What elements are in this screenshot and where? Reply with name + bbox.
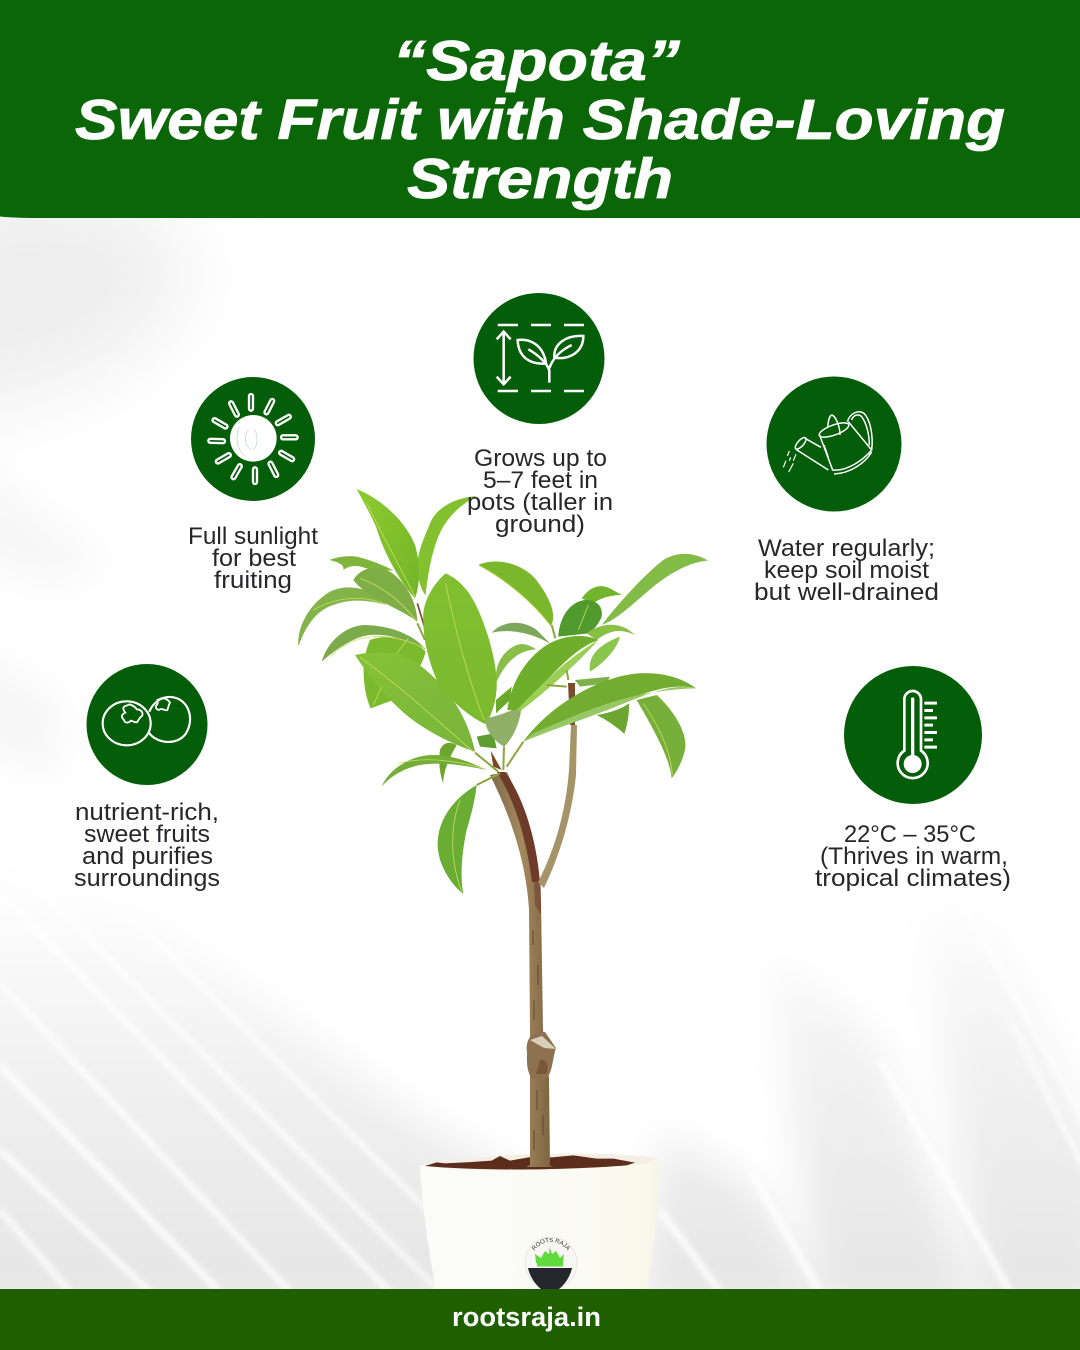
icon: sun bbox=[191, 377, 315, 501]
label: water: Water regularly; bbox=[758, 535, 935, 562]
label: temperature: tropical climates) bbox=[815, 865, 1011, 892]
pot logo: ROOTS RAJA bbox=[532, 1238, 570, 1250]
label: sunlight: fruiting bbox=[214, 567, 292, 594]
label: height bbox=[467, 445, 613, 538]
header banner bbox=[0, 0, 1080, 218]
label: water bbox=[754, 535, 939, 606]
icon: plant height bbox=[474, 293, 604, 424]
icon: fruits bbox=[86, 664, 208, 785]
pot bbox=[420, 1154, 658, 1289]
label: sunlight: for best bbox=[212, 545, 296, 572]
label: fruits bbox=[74, 799, 220, 892]
label: fruits: surroundings bbox=[74, 865, 220, 892]
trunk bbox=[490, 683, 577, 1167]
leaf midribs bbox=[313, 503, 672, 892]
title: Sweet Fruit with Shade-Loving bbox=[75, 88, 1005, 152]
title: Strength bbox=[407, 147, 673, 211]
label: height: ground) bbox=[495, 511, 585, 538]
label: fruits: nutrient-rich, bbox=[75, 799, 219, 826]
connecting stem bbox=[417, 603, 437, 667]
label: water: keep soil moist bbox=[764, 557, 929, 584]
pot logo bbox=[524, 1236, 578, 1289]
leaf petioles bbox=[417, 623, 568, 785]
label: temperature: 22°C – 35°C bbox=[844, 821, 976, 848]
website: rootsraja.in bbox=[452, 1302, 601, 1332]
label: fruits: sweet fruits bbox=[84, 821, 210, 848]
label: sunlight bbox=[188, 523, 318, 594]
icon: thermometer bbox=[844, 666, 982, 804]
label: height: 5–7 feet in bbox=[483, 467, 598, 494]
footer bar bbox=[0, 1289, 1080, 1350]
plant bbox=[258, 460, 708, 1289]
label: sunlight: Full sunlight bbox=[188, 523, 318, 550]
label: temperature bbox=[815, 821, 1011, 892]
icon: watering can bbox=[766, 376, 902, 512]
label: height: pots (taller in bbox=[467, 489, 613, 516]
title: “Sapota” bbox=[393, 29, 681, 93]
title bbox=[75, 29, 1005, 211]
label: temperature: (Thrives in warm, bbox=[820, 843, 1008, 870]
label: water: but well-drained bbox=[754, 579, 939, 606]
leaves bbox=[298, 489, 708, 894]
label: height: Grows up to bbox=[474, 445, 607, 472]
label: fruits: and purifies bbox=[82, 843, 213, 870]
